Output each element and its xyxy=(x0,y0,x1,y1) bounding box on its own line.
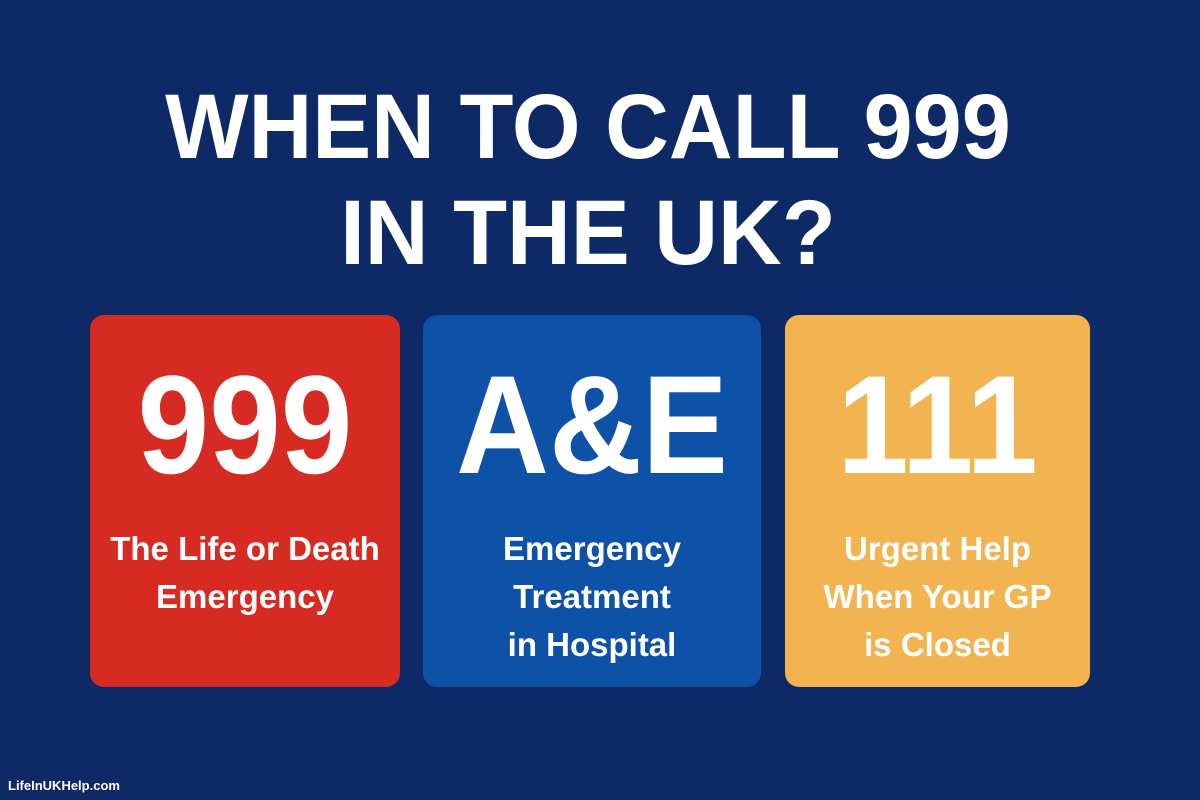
title xyxy=(165,76,1011,284)
number: 999: 999 xyxy=(138,346,352,503)
text: emergency treatment: Emergency xyxy=(503,530,681,567)
footer: LifeInUKHelp.com xyxy=(8,778,120,793)
text: life or death: The Life or Death xyxy=(110,530,380,567)
text: emergency treatment xyxy=(503,530,681,663)
title: WHEN TO CALL 999 xyxy=(165,76,1011,178)
text: emergency treatment: Treatment xyxy=(513,578,671,615)
number: 111: 111 xyxy=(837,346,1038,503)
panel: A&E xyxy=(423,315,761,687)
text: urgent help xyxy=(824,530,1051,663)
heading: A&E: A&E xyxy=(456,346,728,503)
title: IN THE UK? xyxy=(340,182,836,284)
text: urgent help: Urgent Help xyxy=(844,530,1031,567)
text: life or death: Emergency xyxy=(156,578,334,615)
text: urgent help: When Your GP xyxy=(824,578,1051,615)
panel: 999 xyxy=(90,315,400,687)
panel: 111 xyxy=(785,315,1090,687)
text: emergency treatment: in Hospital xyxy=(508,626,676,663)
text: life or death xyxy=(110,530,380,615)
text: urgent help: is Closed xyxy=(864,626,1011,663)
